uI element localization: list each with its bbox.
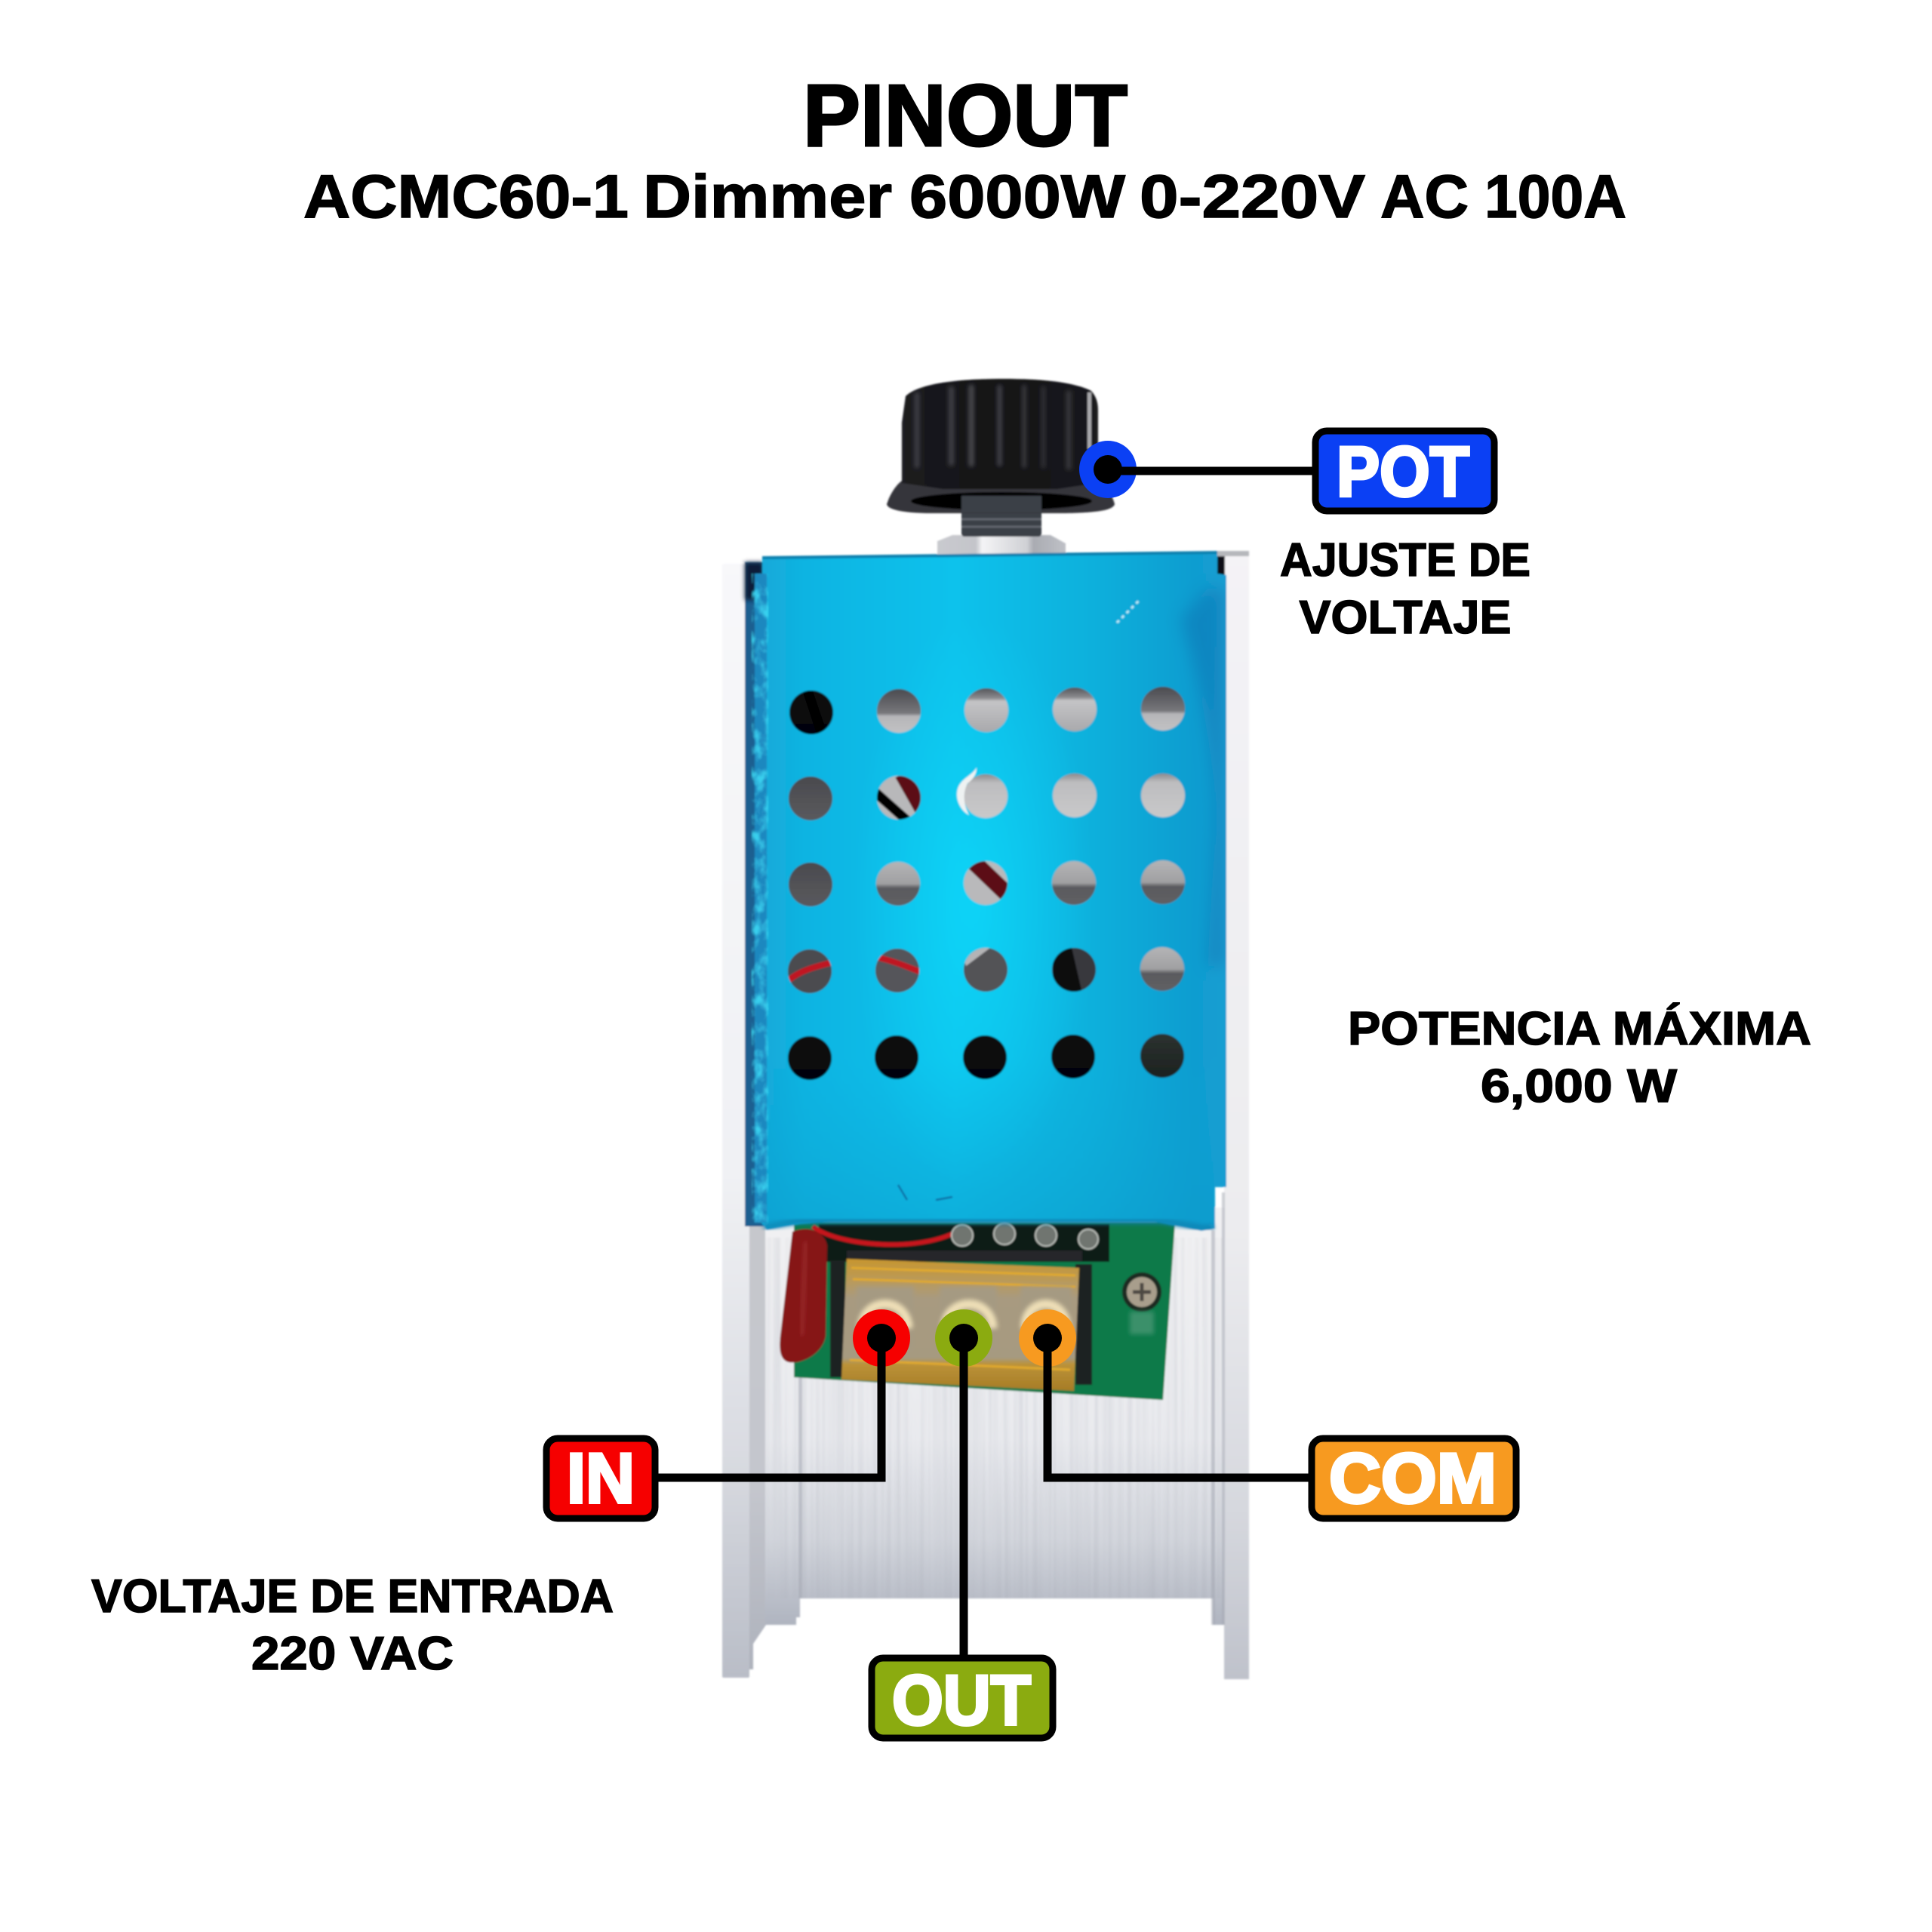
cover highlight (762, 558, 1223, 1223)
subtitle: AC (1380, 163, 1469, 231)
cover left texture (752, 574, 768, 1223)
cover plate (758, 552, 1226, 1231)
OUT connector: dot, line and badge (872, 1309, 1053, 1740)
IN badge box (546, 1438, 655, 1518)
subtitle: Dimmer (643, 163, 892, 231)
OUT badge text: OUT (892, 1660, 1031, 1740)
COM connector: dot, line and badge (1019, 1309, 1516, 1518)
subtitle: 0-220V (1140, 163, 1365, 231)
subtitle (303, 163, 1626, 231)
knob flange (887, 474, 1115, 513)
hole details: wires seen through the openings (788, 691, 1083, 996)
knob flange recess (911, 492, 1092, 510)
knob body (902, 379, 1098, 489)
POT pin centre (1094, 455, 1122, 484)
OUT pin ring (935, 1309, 992, 1367)
OUT badge box (872, 1658, 1053, 1738)
amber terminal cover (841, 1259, 1079, 1391)
terminal contacts (857, 1287, 1072, 1351)
solder joints (952, 1223, 1098, 1249)
IN pin centre (867, 1324, 896, 1352)
cover scratches (898, 600, 1140, 1200)
POT connector: dot, line and badge (1079, 431, 1494, 511)
heatsink brushed streaks (765, 1238, 1223, 1598)
POT badge text: POT (1337, 432, 1469, 511)
right dark notch (1217, 556, 1225, 575)
COM pin centre (1033, 1324, 1062, 1352)
cover lower shade (762, 1057, 1215, 1223)
aluminium heatsink (722, 551, 1249, 1679)
subtitle: 6000W (909, 163, 1126, 231)
heatsink left rail (722, 564, 749, 1678)
heatsink inner grey rib (749, 1223, 765, 1669)
left channel top shadow (745, 562, 763, 600)
COM leader line (1048, 1338, 1313, 1478)
POT pin ring (1079, 441, 1137, 498)
heatsink body (749, 1208, 1224, 1669)
cover bottom edge (764, 1221, 1214, 1228)
hex nut (937, 535, 1066, 554)
label: maximum power: POTENCIA MÁXIMA (1348, 1003, 1811, 1055)
terminal top bar (847, 1251, 1082, 1261)
OUT pin centre (949, 1324, 978, 1352)
knob thread overlap (961, 496, 1041, 512)
label: input voltage (91, 1571, 614, 1680)
potentiometer shaft and nut (937, 494, 1066, 554)
COM pin ring (1019, 1309, 1076, 1367)
IN leader line (649, 1338, 881, 1478)
subtitle: ACMC60-1 (303, 163, 629, 231)
terminal left block (830, 1260, 845, 1377)
label: input voltage: 220 VAC (251, 1628, 454, 1680)
IN connector: dot, line and badge (546, 1309, 910, 1518)
label: voltage adjustment: VOLTAJE (1300, 592, 1511, 644)
knob flutes (915, 385, 1071, 469)
green circuit board (794, 1223, 1175, 1400)
label: maximum power: 6,000 W (1481, 1060, 1678, 1112)
left dark channel (745, 562, 764, 1226)
label: voltage adjustment (1280, 534, 1531, 644)
POT leader line (1108, 466, 1317, 475)
COM badge box (1312, 1438, 1516, 1518)
mounting screw (1122, 1272, 1161, 1334)
heatsink top cap (1217, 551, 1249, 556)
blue cover (752, 552, 1226, 1231)
knob edge highlight (1088, 392, 1091, 449)
OUT leader line (960, 1338, 968, 1660)
COM badge text: COM (1329, 1438, 1497, 1518)
IN badge text: IN (567, 1438, 635, 1518)
cover top edge (762, 552, 1217, 558)
label: voltage adjustment: AJUSTE DE (1280, 534, 1531, 586)
capacitor highlight (801, 1241, 806, 1336)
dark board strip (819, 1224, 1109, 1262)
shaft threads (961, 504, 1041, 527)
label: maximum power (1348, 1003, 1811, 1112)
black knob (887, 379, 1115, 513)
amber cover lines (850, 1268, 1075, 1370)
IN pin ring (853, 1309, 910, 1367)
terminal right block (1075, 1264, 1092, 1385)
POT badge box (1315, 431, 1494, 511)
heatsink right rail (1224, 555, 1249, 1679)
cover right shaded fold (1181, 589, 1224, 966)
threaded shaft (961, 494, 1041, 537)
dimmer module photo illustration (722, 379, 1249, 1679)
circuit board and terminal block (780, 1223, 1175, 1400)
ventilation holes (788, 687, 1185, 1080)
cover left mottled edge (755, 574, 767, 1223)
title: PINOUT (803, 66, 1128, 165)
subtitle: 100A (1484, 163, 1626, 231)
paint chip by centre hole (957, 768, 977, 815)
red wire (813, 1226, 965, 1244)
heatsink rib shading (798, 1192, 1225, 1625)
label: input voltage: VOLTAJE DE ENTRADA (91, 1571, 614, 1623)
capacitor (780, 1229, 827, 1362)
infographic canvas (91, 83, 1811, 1742)
